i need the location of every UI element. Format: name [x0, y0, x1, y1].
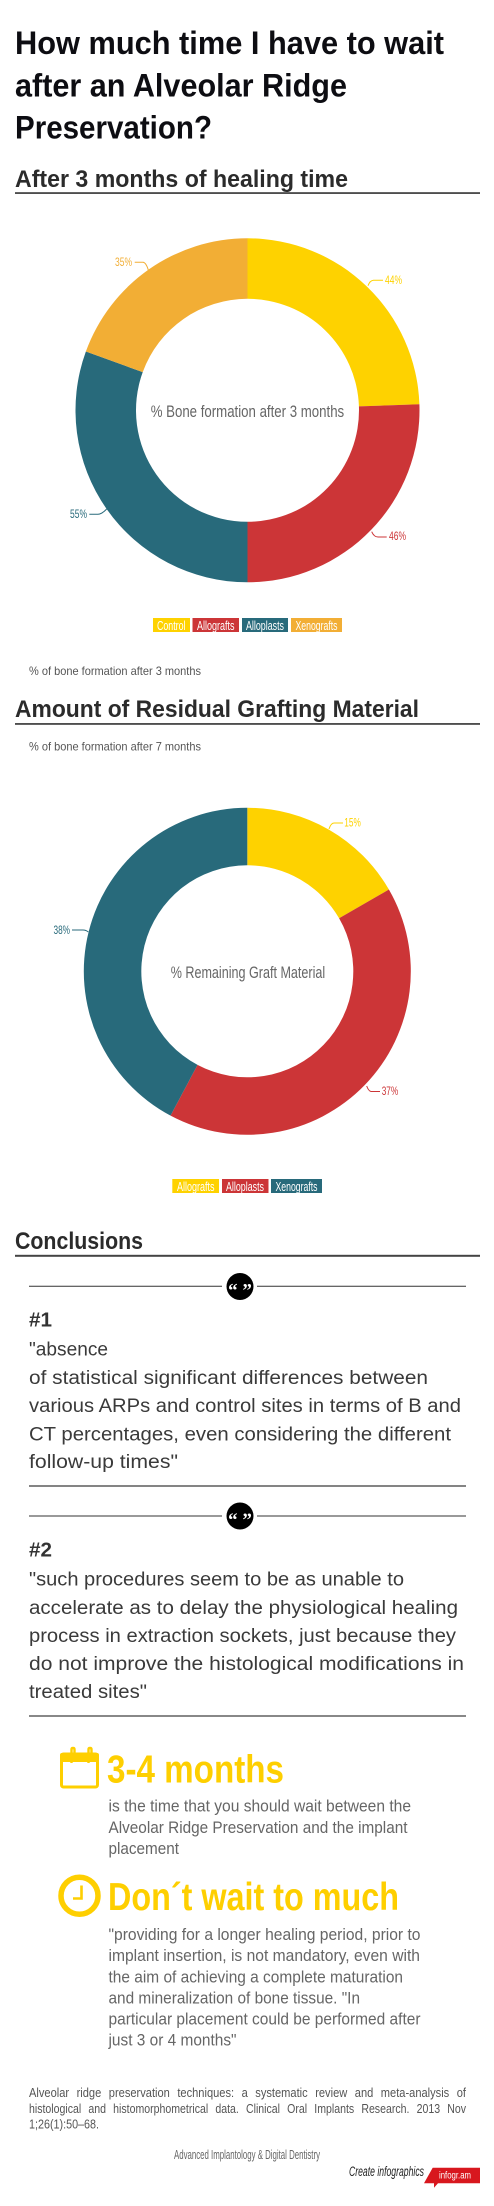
icon: quote: “ ”	[228, 1280, 252, 1302]
text: particular placement could be performed after	[108, 2009, 421, 2028]
note: 7 months: % of bone formation after 7 months	[29, 740, 201, 754]
label: 35%	[115, 255, 148, 270]
label: 38%: 38%	[54, 923, 70, 937]
legend: second chart: Alloplasts	[226, 1180, 264, 1194]
icon: quote	[226, 1502, 254, 1531]
callout: 3-4 months	[60, 1748, 411, 1858]
text: is the time that you should wait between the	[108, 1797, 411, 1816]
slice: allografts 46%	[248, 404, 420, 582]
title: after an Alveolar Ridge	[15, 68, 347, 104]
text	[108, 1925, 421, 2050]
heading: residual grafting material: Amount of Residual Grafting Material	[15, 696, 419, 723]
text: Alveolar Ridge Preservation and the implant	[108, 1818, 408, 1837]
label: 38%	[54, 923, 88, 937]
donut chart: remaining graft material	[54, 808, 411, 1135]
text: quote 2: do not improve the histological modifications in	[29, 1654, 464, 1675]
label: 37%: 37%	[382, 1084, 398, 1098]
label: 55%: 55%	[70, 507, 87, 521]
icon: quote: “ ”	[228, 1510, 252, 1531]
legend: second chart: Xenografts	[276, 1180, 318, 1194]
text: quote 2: #2	[29, 1540, 52, 1562]
label: 46%: 46%	[389, 529, 406, 543]
legend: first chart: Control	[157, 619, 186, 633]
slice: xenografts 35%	[86, 238, 248, 372]
slice: alloplasts 55%	[75, 351, 248, 582]
text: just 3 or 4 months"	[108, 2031, 236, 2050]
infogram badge: infogr.am	[439, 2170, 471, 2181]
slice: alloplasts 37%	[171, 890, 411, 1135]
text: quote 2	[29, 1540, 464, 1703]
text: quote 1: "absence	[29, 1340, 108, 1361]
label: 55%	[70, 507, 107, 521]
donut center label: % Bone formation after 3 months	[151, 402, 344, 421]
footer credit: Advanced Implantology & Digital Dentistry	[174, 2147, 320, 2162]
callout: don't wait too much	[61, 1876, 421, 2050]
text: the aim of achieving a complete maturation	[108, 1967, 403, 1986]
conclusion 2	[29, 1502, 466, 1717]
label: 44%: 44%	[385, 273, 402, 287]
label: 46%	[372, 529, 406, 543]
legend: second chart: Allografts	[177, 1180, 214, 1194]
text: quote 1: various ARPs and control sites in terms of B and	[29, 1396, 461, 1417]
reference: 1;26(1):50–68.	[29, 2118, 99, 2132]
text: quote 2: process in extraction sockets, just because they	[29, 1626, 457, 1647]
slice: allografts 15%	[247, 808, 389, 918]
text: and mineralization of bone tissue. "In	[108, 1988, 360, 2007]
donut chart: bone formation after 3 months	[70, 238, 420, 582]
legend: first chart: Xenografts	[296, 619, 338, 633]
reference	[29, 2086, 467, 2132]
conclusion 1	[29, 1273, 466, 1487]
icon: quote	[226, 1273, 254, 1302]
infogram badge: Create infographics	[349, 2164, 424, 2179]
legend: second chart	[172, 1179, 322, 1194]
label: 15%: 15%	[344, 816, 361, 830]
heading: after 3 months: After 3 months of healing time	[15, 166, 348, 193]
text: quote 1: follow-up times"	[29, 1452, 178, 1473]
text	[108, 1797, 411, 1858]
slice: control 44%	[248, 238, 419, 406]
text: implant insertion, is not mandatory, even with	[108, 1946, 420, 1965]
text: quote 1: #1	[29, 1310, 52, 1332]
infogram badge	[349, 2164, 480, 2188]
slice: xenografts 38%	[84, 808, 247, 1116]
legend: first chart: Alloplasts	[246, 619, 284, 633]
text: quote 1: of statistical significant differences between	[29, 1368, 428, 1389]
heading: 3-4 months	[107, 1749, 284, 1792]
label: 37%	[367, 1084, 398, 1098]
text: "providing for a longer healing period, prior to	[108, 1925, 420, 1944]
heading: Don´t wait to much	[108, 1876, 399, 1919]
label: 44%	[368, 273, 402, 287]
text: quote 2: treated sites"	[29, 1682, 147, 1703]
text: quote 1	[29, 1310, 461, 1473]
text: quote 2: "such procedures seem to be as unable to	[29, 1570, 404, 1591]
note: 3 months: % of bone formation after 3 months	[29, 664, 201, 678]
text: quote 1: CT percentages, even considering the different	[29, 1425, 452, 1446]
label: 35%: 35%	[115, 255, 132, 269]
icon: clock	[61, 1877, 98, 1914]
donut center label: % Remaining Graft Material	[171, 963, 325, 982]
text: quote 2: accelerate as to delay the physiological healing	[29, 1598, 458, 1619]
heading: conclusions: Conclusions	[15, 1228, 143, 1255]
text: placement	[108, 1839, 179, 1858]
title: Preservation?	[15, 110, 212, 146]
legend: first chart: Allografts	[197, 619, 234, 633]
legend: first chart	[153, 618, 342, 633]
label: 15%	[329, 816, 361, 830]
title	[15, 25, 444, 146]
title: How much time I have to wait	[15, 25, 444, 61]
icon: calendar	[60, 1748, 99, 1787]
